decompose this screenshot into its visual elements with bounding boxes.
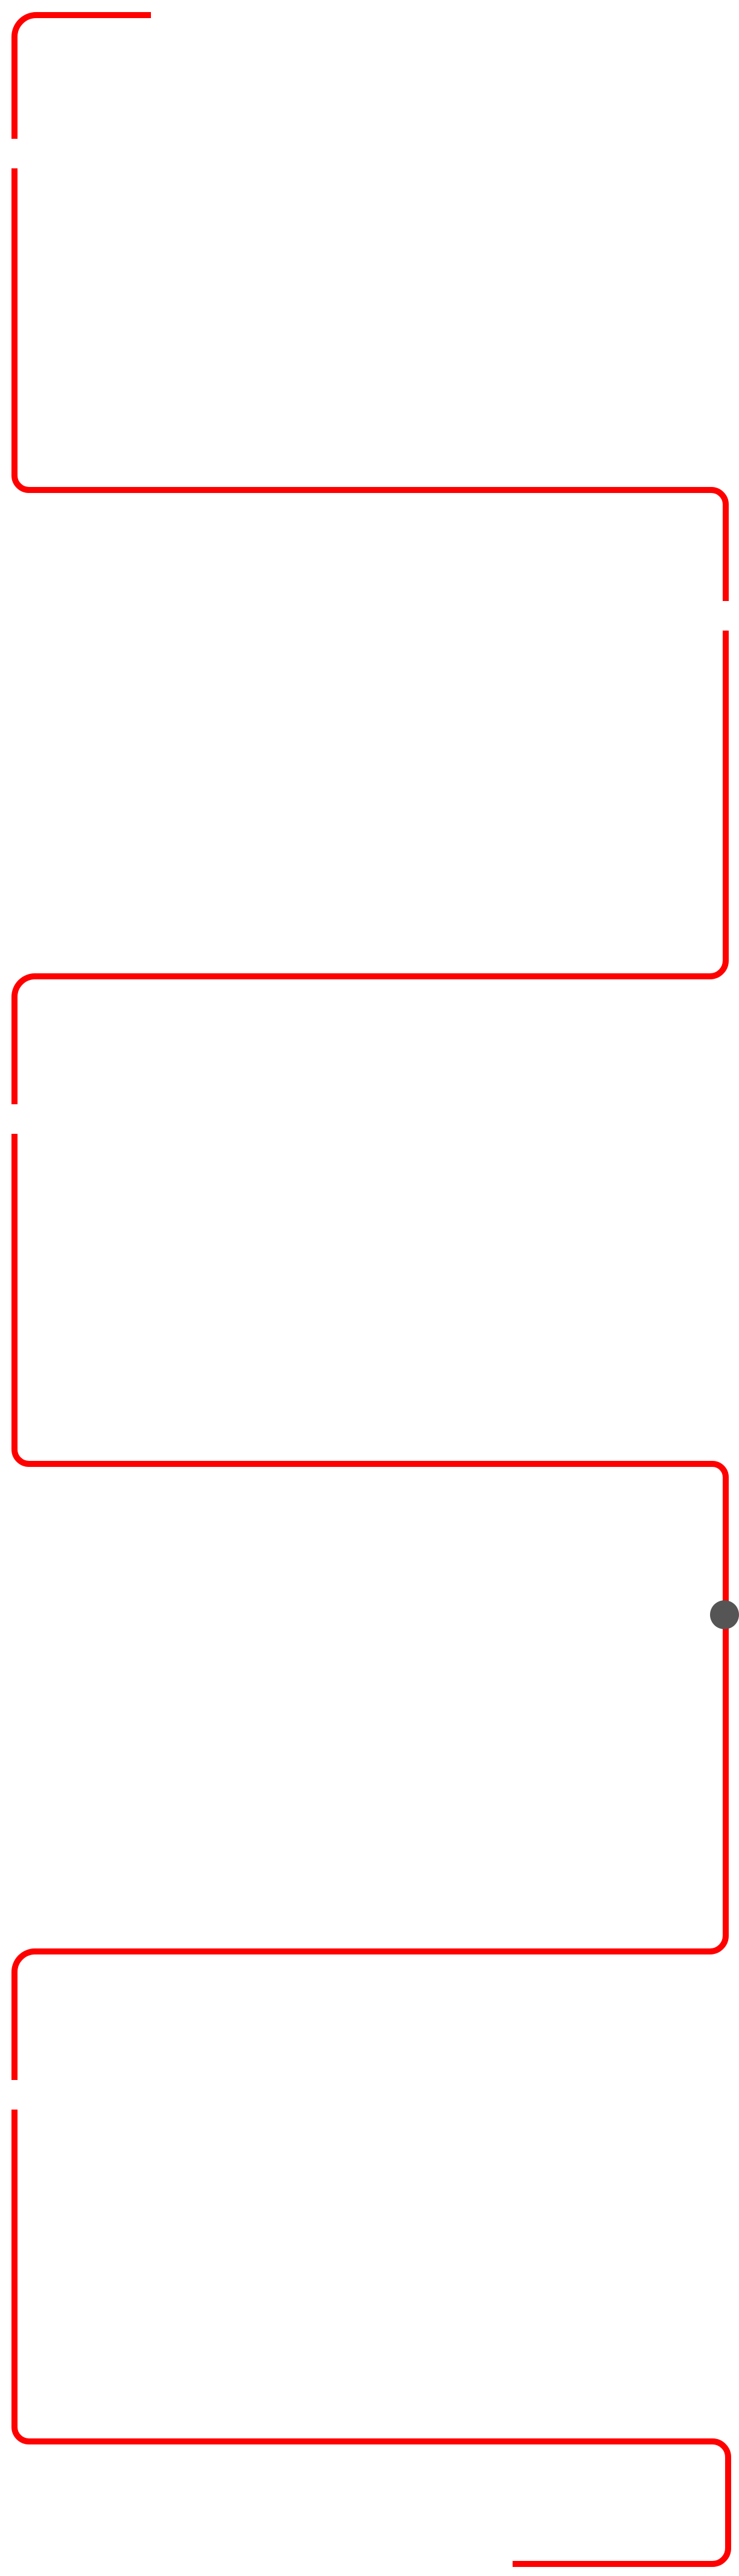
path segment: left 1 [14,168,726,601]
marker dot [710,1600,739,1629]
path segment: left 2 [14,1134,726,2080]
path segment: right 1 [14,631,726,1104]
path segment: end [14,2110,728,2564]
path segment: start [14,15,151,139]
